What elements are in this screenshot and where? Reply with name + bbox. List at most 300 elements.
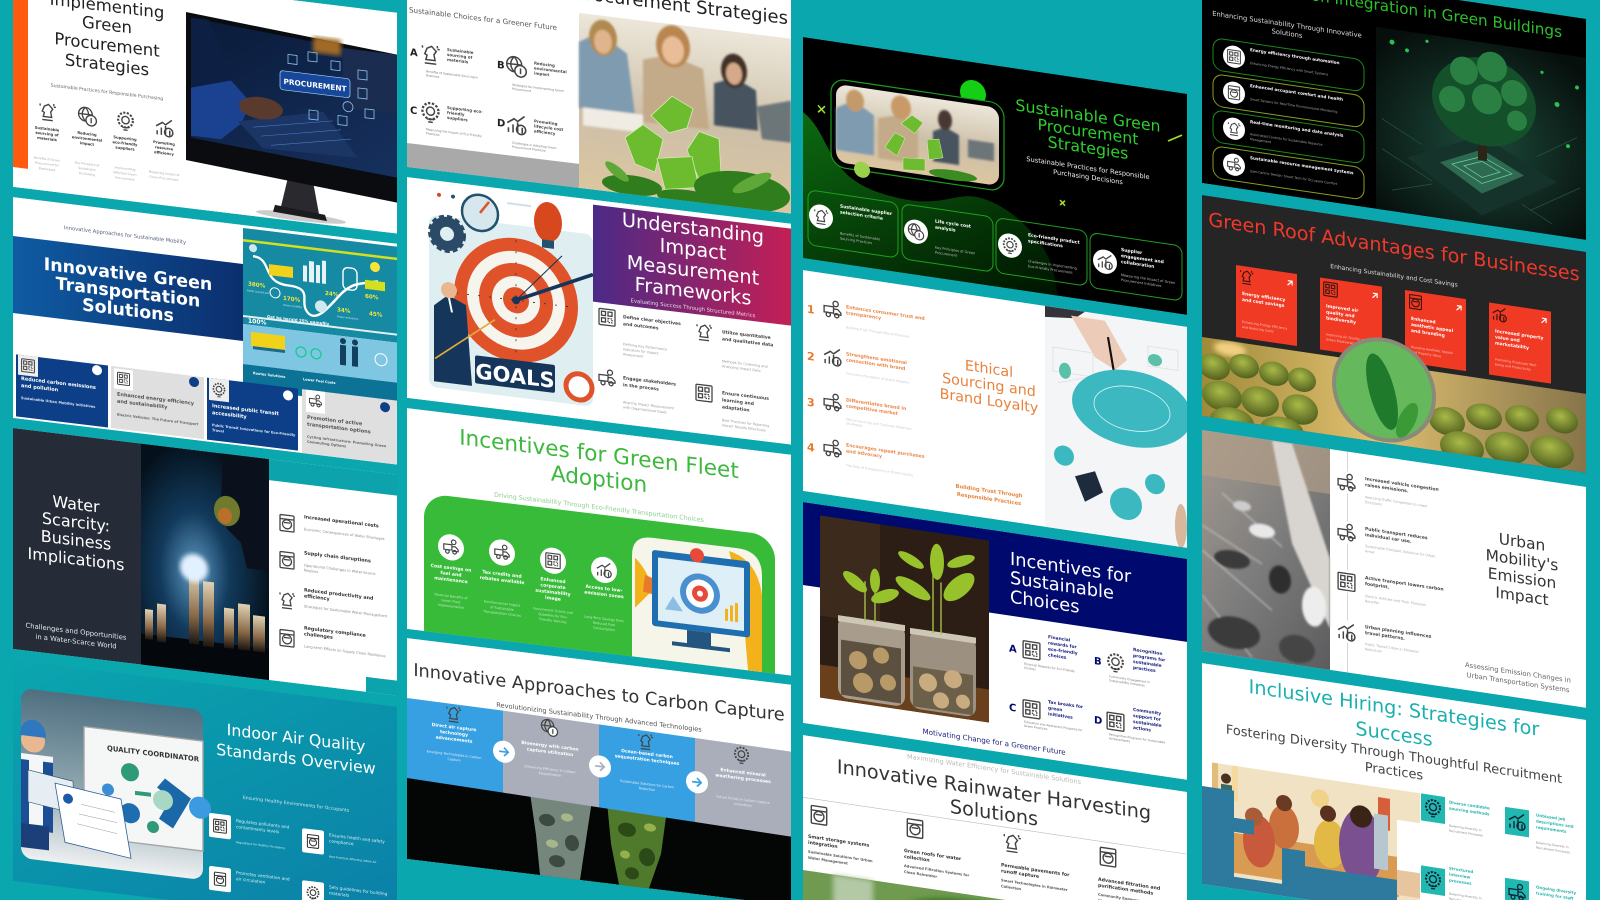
image: goals target: GOALS (475, 358, 555, 393)
list: incentive items: Financial (1048, 634, 1071, 644)
image: transport infographic: 170% (283, 296, 301, 304)
card labels (1242, 291, 1543, 354)
icon row (40, 102, 173, 137)
process bands: capture utilization (527, 747, 573, 758)
card descriptions: Management (1250, 137, 1272, 144)
item labels: runoff capture (1001, 868, 1039, 880)
title band: Measurement (627, 251, 760, 290)
card labels: selection criteria (840, 209, 883, 222)
tile descriptions: Balancing Diversity in (1449, 824, 1482, 832)
list: incentive items: Tax breaks for (1048, 699, 1084, 711)
panel: green roof advantages (1198, 194, 1586, 490)
card descriptions: Sourcing Practices (840, 236, 872, 245)
list: emission items: Sustainable Transport Solutions for Urban (1365, 544, 1435, 559)
card descriptions: Benefits of Sustainable (840, 231, 880, 241)
panel: urban mobility emission impact (1202, 430, 1586, 708)
title block: Implications (28, 544, 124, 575)
list: emission items: Reducing Traffic Congestion to Lower (1365, 495, 1428, 509)
feature labels: maintenance (434, 575, 468, 585)
green panel (424, 496, 775, 674)
card: energy efficiency (111, 366, 204, 439)
panel: sustainable green procurement strategies dark (803, 37, 1187, 315)
list: business impacts: Reduced productivity and (304, 587, 374, 602)
card icons (1241, 269, 1548, 329)
panel: implementing green procurement strategies (13, 0, 397, 234)
numbered list: 1 (807, 303, 815, 317)
panel: sustainable choices (407, 0, 791, 219)
subtitle: Practices (1365, 760, 1423, 784)
list: four choices: Practices (426, 131, 440, 137)
heading: Adoption (551, 462, 647, 498)
tile labels: Structured (1449, 866, 1473, 874)
feature descriptions: Purchasing (79, 171, 95, 177)
list: framework items: Define clear objectives (623, 314, 681, 327)
list: framework items: Engage stakeholders (623, 375, 676, 388)
card labels: Increased property (1495, 328, 1543, 342)
list: incentive items: Education and Awareness Programs for (1024, 720, 1083, 732)
feature labels (35, 126, 175, 157)
tile descriptions (1449, 824, 1570, 900)
image: goals target (429, 188, 593, 407)
card labels: analysis (935, 225, 956, 234)
process bands: Sustainable Solutions for Carbon (620, 779, 674, 789)
tile labels: interview (1449, 872, 1470, 880)
list: business impacts: Regulatory compliance (304, 625, 367, 639)
list: incentive items: Community Engagement in (1109, 674, 1150, 684)
timeline line (1346, 451, 1349, 673)
process bands: Ocean-based carbon (621, 748, 673, 760)
cards (1213, 38, 1364, 200)
card labels: Enhanced (1411, 316, 1436, 326)
tile labels: Ongoing diversity (1536, 884, 1576, 895)
list: framework items: with Organizational Goals (623, 405, 667, 415)
numbered list: Strengthens emotional (846, 351, 907, 366)
list: incentive items: Sustainability Initiatives (1109, 678, 1145, 688)
list: four choices (410, 42, 567, 155)
numbered list: transparency (846, 310, 881, 322)
list: business impacts: Increased operational costs (304, 514, 379, 529)
image: quality coordinator (20, 688, 211, 881)
list: incentive items: green (1048, 705, 1062, 713)
numbered list: Building Trust Through Ethical Practices (846, 325, 909, 339)
heading: Innovative Approaches to Carbon Capture (413, 661, 785, 726)
cards (1236, 265, 1551, 384)
numbered list: 2 (807, 350, 815, 364)
numbered list: connection with brand (846, 357, 905, 372)
heading: Procurement (1038, 115, 1138, 149)
subtitle: Purchasing Decisions (1053, 168, 1123, 186)
tile labels: Diverse candidate (1449, 800, 1490, 811)
card descriptions: Smart Sensors for Real-Time Environmental Monitoring (1250, 97, 1337, 114)
heading: Innovative Rainwater Harvesting (837, 755, 1151, 824)
heading: Sourcing and (942, 371, 1036, 400)
image: traffic (1202, 430, 1330, 670)
item descriptions: Smart Technologies in Rainwater (1001, 878, 1068, 892)
card labels: Improved air (1326, 303, 1359, 314)
feature descriptions: Benefits of Green (34, 156, 60, 163)
list: four choices: Strategies for Implementing Green (512, 83, 564, 93)
feature descriptions: Subsidies for Eco- (538, 612, 568, 620)
numbered list: 4 (807, 441, 815, 455)
item labels: Green roofs for water (904, 848, 962, 863)
list: framework items: adaptation (722, 404, 750, 414)
heading: Choices (1010, 587, 1079, 618)
title block: in a Water-Scarce World (35, 633, 117, 651)
list: incentive items: Achievements (1109, 736, 1131, 743)
list: framework items: Ensure continuous (722, 390, 769, 402)
image: transport infographic: Get be herald 25% gamefily (267, 314, 330, 326)
feature labels: impact (80, 141, 94, 147)
subtitle: Assessing Emission Changes in (1465, 661, 1571, 685)
card: public transit (207, 378, 298, 451)
panel: automation integration in green buildings (1202, 0, 1586, 240)
item descriptions: Advanced Filtration Systems for (904, 864, 969, 878)
list: four choices: Reducing (534, 60, 555, 68)
list: incentive items: eco-friendly (1048, 646, 1078, 657)
feature descriptions: Transportation Choices (482, 609, 521, 618)
list: emission items: footprint. (1365, 581, 1390, 591)
card labels: Supplier (1121, 247, 1143, 256)
title block: Business (41, 526, 111, 554)
list: four choices: Benefits of Sustainable Sourcing in (426, 69, 478, 80)
numbered list: Consumer Perception of Brand Integrity (846, 371, 909, 385)
heading: Mobility's (1486, 546, 1558, 575)
image: transport infographic: 60% (365, 294, 379, 301)
feature descriptions: Key Principles of (75, 161, 100, 168)
tile labels: Best Practices Affecting Indoor Air (329, 854, 377, 864)
feature descriptions: of Sustainable (490, 605, 514, 612)
image: coin jars and seedlings (820, 516, 989, 723)
framed image (831, 78, 1004, 192)
teal strip (269, 459, 397, 496)
list: incentive items: choices (1048, 652, 1067, 661)
image: transport infographic: 34% (337, 307, 351, 315)
subtitle: Revolutionizing Sustainability Through Advanced Technologies (496, 701, 702, 734)
heading: Ethical (965, 358, 1013, 381)
subtitle: Urban Transportation Systems (1467, 671, 1570, 694)
feature labels: fuel and (440, 570, 462, 579)
feature descriptions (434, 592, 624, 633)
card descriptions: Automated Controls for Sustainable Resource (1250, 132, 1323, 147)
card descriptions: Improving Air Quality and (1326, 332, 1367, 342)
card descriptions: and Reducing Costs (1242, 325, 1274, 334)
list: four choices: C (410, 105, 417, 117)
feature descriptions: Procurement for (35, 161, 60, 168)
list: four choices: Measuring the Impact of Eco-Friendly (426, 127, 482, 138)
list: incentive items: initiatives (1048, 711, 1073, 721)
list: incentive items: support for (1133, 713, 1162, 723)
card descriptions: Procurement (935, 251, 958, 258)
heading: Green Roof Advantages for Businesses (1208, 208, 1580, 286)
list: emission items: Electric Vehicles and Their Emission (1365, 594, 1426, 607)
list: incentive items (1009, 629, 1166, 749)
feature descriptions: Environmental Impact (484, 599, 521, 608)
feature descriptions: Implementing (115, 165, 135, 172)
card descriptions: User-Centric Design: Smart Tech for Occupant Comfort (1250, 169, 1338, 186)
card: energy efficiency: Electric Vehicles: The Future of Transport (117, 413, 199, 427)
item labels (808, 834, 1160, 898)
feature labels: emission zones (584, 590, 624, 600)
feature descriptions: Green Procurement (149, 175, 179, 182)
heading: Incentives for Green Fleet (459, 425, 739, 484)
image: quality coordinator: QUALITY COORDINATOR (107, 743, 200, 764)
card labels: and cost savings (1242, 297, 1285, 309)
panel: innovative green transportation solutions (13, 197, 397, 465)
card labels: Sustainable resource management systems (1250, 155, 1354, 175)
image: transport infographic: Public transit use (247, 288, 270, 295)
tile labels: materials (329, 890, 350, 899)
image: transport infographic: Fewer emissions (337, 314, 359, 321)
list: four choices: Business (426, 73, 440, 79)
feature descriptions: Green Fleet (441, 598, 461, 605)
card labels: aesthetic appeal (1411, 322, 1454, 334)
list: emission items (1338, 470, 1444, 663)
panel: indoor air quality (13, 660, 397, 900)
item descriptions: Collection (1001, 884, 1022, 891)
feature labels: corporate (540, 582, 566, 591)
tile labels: requirements (1536, 824, 1567, 834)
list: incentive items: Recognition Programs for Sustainable (1109, 732, 1165, 745)
subtitle: Ensuring Healthy Environments for Occupants (243, 795, 350, 814)
numbered list: Differentiates brand in (846, 397, 906, 412)
item descriptions (808, 850, 1153, 900)
subtitle: Fostering Diversity Through Thoughtful Recruitment (1226, 723, 1562, 787)
card descriptions: Eco-Friendly Procurement (1028, 264, 1073, 275)
item descriptions: Sustainable Solutions for Urban (808, 850, 873, 863)
card: energy efficiency: and sustainability (117, 399, 168, 411)
footer tagline: Motivating Change for a Greener Future (922, 727, 1066, 757)
list: emission items: travel patterns. (1365, 630, 1405, 642)
feature descriptions: Government Grants and (533, 606, 573, 615)
heading: Incentives for (1010, 549, 1132, 588)
card: active transportation: Promotion of active (307, 415, 363, 428)
card descriptions: Key Principles of Green (935, 246, 975, 255)
feature descriptions: Implementation (438, 603, 464, 610)
card labels: Real-time monitoring and data analysis (1250, 119, 1344, 138)
title band: Innovative Green (44, 255, 212, 295)
title band: Understanding (622, 208, 764, 248)
card labels: engagement and (1121, 253, 1164, 265)
subtitle: Solutions (1272, 27, 1303, 40)
card: public transit: Public Transit Innovations for Eco-Friendly (212, 423, 296, 437)
card descriptions: being and Productivity (1495, 362, 1531, 372)
tile labels: Regulates pollutants and (236, 818, 290, 831)
list: incentive items: practices (1133, 665, 1156, 674)
image: businessman and city (141, 444, 269, 680)
list: business impacts: Supply chain disruptions (304, 550, 371, 564)
list: incentive items: rewards for (1048, 640, 1077, 651)
icon tiles (209, 813, 324, 900)
list: framework items: Aligning Impact Measurement (623, 400, 675, 411)
heading: Solutions (950, 795, 1038, 831)
card descriptions: and Property Value (1411, 350, 1441, 358)
footer note: Responsible Practices (957, 492, 1021, 507)
item labels: collection (904, 854, 930, 864)
list: business impacts: efficiency (304, 593, 331, 603)
feature descriptions: Long-Term Savings from (584, 615, 624, 623)
card descriptions: Boosting Aesthetic Appeal (1411, 345, 1453, 355)
list: incentive items: sustainable (1133, 719, 1162, 729)
list: four choices: lifecycle cost (534, 123, 563, 132)
feature descriptions: Reduced Fuel (593, 621, 615, 627)
list: incentive items: Recognition (1133, 647, 1162, 657)
list: emission items: Areas (1365, 549, 1375, 555)
image: transport infographic: 24% (325, 291, 339, 299)
cards (808, 190, 1182, 301)
list: incentive items: B (1094, 656, 1102, 668)
list: business impacts: challenges (304, 631, 333, 641)
card: reduced carbon: Reduced carbon emissions (21, 376, 96, 391)
list: framework items (599, 308, 773, 433)
image: hand over teal diagram (1045, 306, 1192, 550)
feature labels: resource (155, 145, 174, 152)
feature labels: environmental (72, 135, 102, 143)
title band (593, 205, 791, 326)
card descriptions (1242, 320, 1537, 373)
card descriptions (1250, 61, 1338, 186)
card descriptions: Measuring the Impact of Green (1121, 273, 1175, 285)
feature descriptions: Measuring Impact of (149, 169, 180, 177)
item labels: Advanced filtration and (1098, 877, 1160, 892)
card labels (1250, 47, 1354, 175)
list: business impacts: Strategies for Sustainable Water Management (304, 604, 388, 619)
card labels: biodiversity (1326, 315, 1356, 326)
list: business impacts: Operational Challenges in Water-Scarce (304, 563, 376, 576)
numbered list (807, 297, 925, 479)
tile labels: processes (1449, 878, 1472, 886)
heading: Indoor Air Quality (227, 720, 365, 756)
card labels: and branding (1411, 328, 1445, 339)
tile labels (1449, 800, 1576, 900)
card: reduced carbon: Sustainable Urban Mobility Initiatives (21, 396, 95, 409)
process bands: Bioenergy with carbon (521, 740, 579, 753)
list: emission items: Public transport reduces (1365, 526, 1428, 541)
card icons (809, 203, 1117, 275)
decorative marks (818, 81, 1182, 223)
card: public transit: accessibility (212, 410, 247, 420)
feature labels: Access to low- (585, 584, 623, 594)
subtitle: Enhancing Sustainability and Cost Savings (1330, 263, 1458, 289)
panel: innovative approaches to carbon capture (407, 638, 791, 900)
list: framework items: Indicators for Impact (623, 347, 659, 356)
card labels: Life cycle cost (935, 219, 972, 230)
heading: Success (1355, 717, 1433, 751)
feature labels: Tax credits and (482, 569, 522, 580)
card: active transportation: transportation options (307, 422, 371, 435)
process bands: Enhancing Efficiency in Carbon (524, 764, 576, 774)
card descriptions: Enhancing Energy Efficiency (1242, 320, 1287, 331)
item descriptions: Water Management (808, 856, 848, 866)
card descriptions: Promoting Employee Well- (1495, 357, 1537, 368)
panel: incentives for green fleet adoption (407, 408, 791, 698)
list: four choices: friendly (447, 110, 465, 117)
list: four choices: efficiency (534, 128, 556, 136)
numbered list: Encourages repeat purchases (846, 442, 925, 460)
feature labels: Promoting (153, 140, 175, 147)
list: framework items: in the process (623, 382, 659, 393)
image: monitor: PROCUREMENT (283, 77, 347, 94)
tile labels: air circulation (236, 876, 265, 886)
process bands: Enhanced mineral (720, 767, 766, 779)
heading: Green (82, 12, 132, 37)
decorative circle (854, 161, 870, 179)
heading: Procurement (54, 29, 160, 61)
list: business impacts: Regions (304, 568, 318, 574)
numbered list: competitive market (846, 403, 899, 417)
card descriptions (840, 231, 1175, 290)
list: four choices: Sustainable (447, 47, 474, 55)
feature labels: eco-friendly (113, 140, 138, 147)
feature labels: sustainability (535, 588, 571, 598)
process bands: Sequestration (539, 771, 561, 778)
process bands: Capture (447, 757, 461, 763)
feature descriptions (34, 156, 180, 182)
image: carbon footprints (407, 773, 791, 900)
list: framework items: Impact Results Effectively (722, 423, 766, 433)
image: transport infographic: Lower Fuel Costs (303, 377, 335, 385)
list: framework items: and qualitative data (722, 336, 773, 348)
card labels (840, 203, 1164, 271)
title block (13, 428, 141, 665)
card descriptions: Urban Biodiversity (1326, 337, 1356, 346)
tile labels: compliance (329, 838, 354, 847)
list: emission items: Urban planning influences (1365, 624, 1432, 640)
green glow (803, 112, 1058, 296)
panel: water scarcity (13, 428, 397, 696)
tile labels: Promotes ventilation and (236, 870, 290, 883)
item labels: Smart storage systems (808, 834, 869, 849)
panel: ethical sourcing and brand loyalty (803, 270, 1192, 550)
list: framework items: Defining Key Performance (623, 342, 667, 352)
list: incentive items: A (1009, 644, 1017, 656)
list: business impacts (280, 511, 388, 659)
list: framework items: and outcomes (623, 321, 659, 332)
feature descriptions: Businesses (39, 166, 56, 172)
card: active transportation (302, 389, 397, 465)
feature descriptions: Sustainable (78, 166, 96, 172)
image: transport infographic: 380% (248, 282, 266, 290)
tile labels: Sets guidelines for building (329, 884, 388, 898)
list: incentive items: D (1094, 715, 1102, 727)
card labels: Sustainable supplier (840, 203, 893, 217)
panel: inclusive hiring (1202, 663, 1586, 900)
feature labels: Sustainable (35, 126, 60, 133)
feature descriptions: Procurement (115, 175, 135, 182)
list: emission items: Active transport lowers carbon (1365, 575, 1444, 593)
footer note: Building Trust Through (956, 484, 1023, 500)
arrows (493, 739, 708, 795)
subtitle: Innovative Approaches for Sustainable Mobility (64, 225, 186, 246)
card: reduced carbon (16, 354, 108, 428)
icon tiles (1421, 793, 1529, 900)
feature labels: Enhanced (540, 576, 566, 585)
image: transport infographic (243, 228, 397, 408)
heading: Urban (1499, 530, 1545, 555)
subtitle: Driving Sustainability Through Eco-Friendly Transportation Choices (494, 492, 704, 524)
item descriptions: Clean Rainwater (904, 870, 937, 879)
process bands: sequestration techniques (615, 753, 680, 767)
list: four choices: Procurement Practices (512, 145, 546, 153)
tile labels (236, 818, 388, 900)
list: emission items: Reduction (1365, 647, 1382, 654)
item labels: Permeable pavements for (1001, 862, 1070, 879)
list: four choices: suppliers (447, 115, 468, 122)
list: four choices: sourcing of (447, 52, 472, 60)
card labels: value and (1495, 334, 1520, 344)
feature labels: rebates available (480, 575, 524, 586)
process bands: Emerging Technologies in Carbon (427, 749, 481, 760)
numbered list: 3 (807, 396, 815, 410)
